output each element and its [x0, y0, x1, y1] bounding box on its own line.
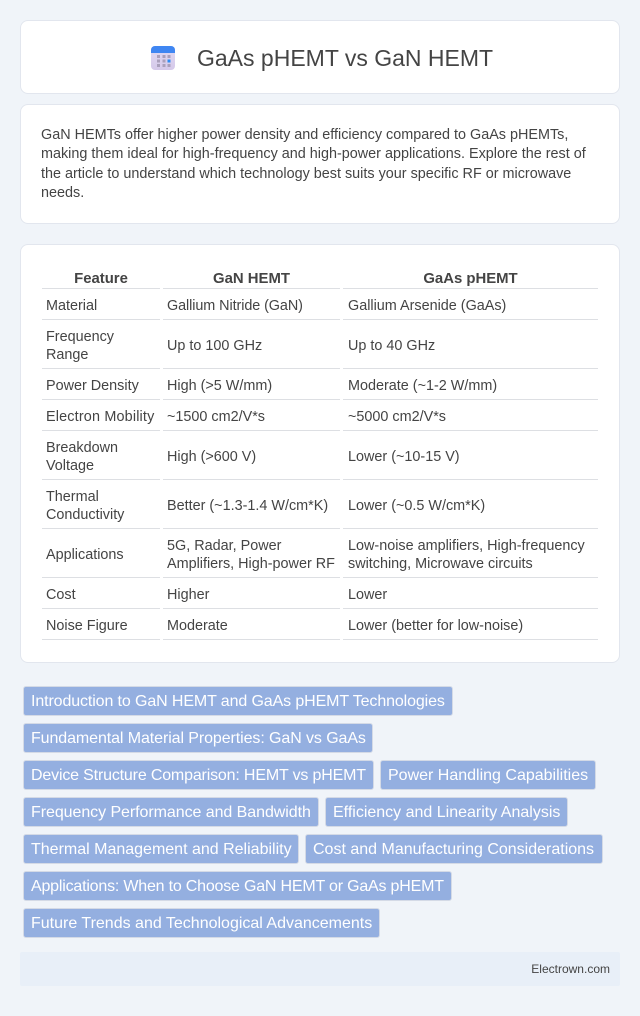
tag: introduction: Introduction to GaN HEMT and GaAs pHEMT Technologies — [31, 693, 445, 710]
row: frequency range — [46, 329, 435, 363]
row: thermal conductivity: Lower (~0.5 W/cm*K) — [348, 498, 485, 514]
intro text: GaN HEMTs offer higher power density and efficiency compared to GaAs pHEMTs, — [41, 126, 568, 142]
row: thermal conductivity — [46, 489, 485, 523]
row: applications: switching, Microwave circuits — [348, 556, 533, 572]
tag: device structure — [23, 760, 374, 790]
intro text: the article to understand which technology best suits your specific RF or microwave — [41, 166, 571, 182]
tag: applications — [23, 871, 452, 901]
tag: material properties — [23, 723, 373, 753]
row: electron mobility: ~1500 cm2/V*s — [167, 409, 265, 425]
tag: thermal management — [23, 834, 299, 864]
row: breakdown voltage: Lower (~10-15 V) — [348, 449, 460, 465]
footer: Electrown.com — [531, 962, 610, 976]
row: frequency range: Up to 40 GHz — [348, 338, 435, 354]
tag: future trends — [23, 908, 380, 938]
tag: frequency performance: Frequency Performance and Bandwidth — [31, 804, 311, 821]
tag: device structure: Device Structure Comparison: HEMT vs pHEMT — [31, 767, 366, 784]
table header — [74, 271, 518, 287]
title: GaAs pHEMT vs GaN HEMT — [197, 45, 493, 71]
panel: comparison table — [20, 244, 620, 663]
row: electron mobility: ~5000 cm2/V*s — [348, 409, 446, 425]
row: cost: Cost — [46, 587, 76, 603]
intro text: needs. — [41, 185, 84, 201]
row: breakdown voltage: Breakdown — [46, 440, 118, 456]
tag: cost and manufacturing — [305, 834, 603, 864]
tag: introduction — [23, 686, 453, 716]
footer — [20, 952, 620, 986]
table header: GaN HEMT — [213, 271, 290, 287]
tag: future trends: Future Trends and Technological Advancements — [31, 915, 372, 932]
tag: efficiency: Efficiency and Linearity Analysis — [333, 804, 560, 821]
tag: cost and manufacturing: Cost and Manufacturing Considerations — [313, 841, 594, 858]
row: power density: Moderate (~1-2 W/mm) — [348, 378, 497, 394]
header panel — [20, 20, 620, 94]
row: thermal conductivity: Thermal — [46, 489, 99, 505]
tag: thermal management: Thermal Management and Reliability — [31, 841, 292, 858]
row: material — [46, 298, 506, 314]
row: cost — [46, 587, 387, 603]
table header: Feature — [74, 271, 128, 287]
row: noise figure: Noise Figure — [46, 618, 128, 634]
row: frequency range: Up to 100 GHz — [167, 338, 262, 354]
intro text — [41, 126, 586, 201]
row: electron mobility: Electron Mobility — [46, 409, 154, 425]
row: frequency range: Range — [46, 347, 88, 363]
table header: GaAs pHEMT — [423, 271, 518, 287]
row: power density — [46, 378, 497, 394]
tag: efficiency — [325, 797, 568, 827]
row: applications: Applications — [46, 547, 124, 563]
row: applications — [46, 538, 585, 572]
row: thermal conductivity: Conductivity — [46, 507, 124, 523]
tag: applications: Applications: When to Choose GaN HEMT or GaAs pHEMT — [31, 878, 444, 895]
row: power density: Power Density — [46, 378, 139, 394]
row: frequency range: Frequency — [46, 329, 114, 345]
row: thermal conductivity: Better (~1.3-1.4 W/cm*K) — [167, 498, 328, 514]
row: electron mobility — [46, 409, 446, 425]
tag: frequency performance — [23, 797, 319, 827]
row: material: Gallium Nitride (GaN) — [167, 298, 303, 314]
row: cost: Lower — [348, 587, 387, 603]
tag: power handling — [380, 760, 596, 790]
intro panel — [20, 104, 620, 224]
row: power density: High (>5 W/mm) — [167, 378, 272, 394]
row: breakdown voltage — [46, 440, 460, 474]
row: material: Material — [46, 298, 97, 314]
tag: material properties: Fundamental Material Properties: GaN vs GaAs — [31, 730, 366, 747]
tag: power handling: Power Handling Capabilities — [388, 767, 588, 784]
row: applications: Low-noise amplifiers, High-frequency — [348, 538, 585, 554]
icon: calendar — [151, 46, 175, 70]
row: applications: 5G, Radar, Power — [167, 538, 281, 554]
row: breakdown voltage: Voltage — [46, 458, 94, 474]
row: noise figure — [46, 618, 523, 634]
row: cost: Higher — [167, 587, 209, 603]
intro text: making them ideal for high-frequency and high-power applications. Explore the rest of — [41, 146, 586, 162]
row: applications: Amplifiers, High-power RF — [167, 556, 335, 572]
row: noise figure: Moderate — [167, 618, 228, 634]
row: noise figure: Lower (better for low-noise) — [348, 618, 523, 634]
row: material: Gallium Arsenide (GaAs) — [348, 298, 506, 314]
row: breakdown voltage: High (>600 V) — [167, 449, 256, 465]
